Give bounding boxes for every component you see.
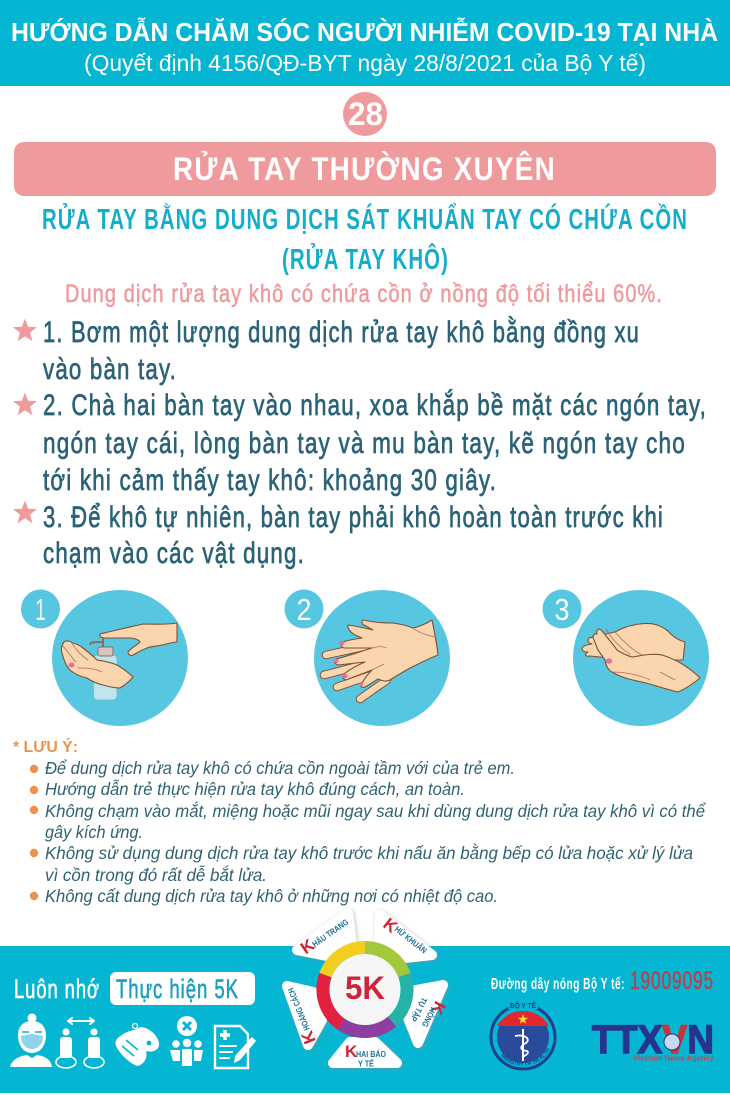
- illustration 2: rubbing hands: 2: [296, 592, 312, 627]
- note items: Không chạm vào mắt, miệng hoặc mũi ngay sau khi dùng dung dịch rửa tay khô vì có thể: [45, 801, 706, 821]
- petal labels: Y TẾ: [358, 1058, 374, 1068]
- subtitle: (Quyết định 4156/QĐ-BYT ngày 28/8/2021 của Bộ Y tế): [84, 50, 646, 76]
- icon: person with mask: [10, 1014, 52, 1067]
- centre: [330, 954, 400, 1025]
- reminder label: Luôn nhớ: [14, 974, 100, 1004]
- notes heading: * LƯU Ý:: [13, 737, 78, 756]
- note items: Hướng dẫn trẻ thực hiện rửa tay khô đúng cách, an toàn.: [45, 779, 465, 799]
- step 2: [13, 389, 707, 497]
- note items: Không cất dung dịch rửa tay khô ở những nơi có nhiệt độ cao.: [45, 886, 498, 906]
- number badge 28: [343, 92, 387, 136]
- step 3: chạm vào các vật dụng.: [43, 537, 305, 570]
- illustration 1: pump sanitizer: [21, 590, 188, 726]
- petal labels: HẨU TRANG: [310, 916, 351, 949]
- icon: front hand: [593, 629, 700, 692]
- icon: two people distancing: [56, 1018, 104, 1068]
- illustration 1: pump sanitizer: 1: [36, 592, 46, 627]
- petal labels: TỤ TẬP: [408, 996, 430, 1024]
- illustration 3: cupped hands: 3: [554, 592, 570, 627]
- petal labels: [285, 914, 449, 1068]
- step 1: vào bàn tay.: [43, 353, 177, 386]
- reminder label: Thực hiện 5K: [116, 974, 239, 1004]
- icon: top hand: [333, 620, 438, 687]
- ring: [323, 948, 407, 1032]
- icons: 5K actions: [10, 1014, 256, 1068]
- step 1: [13, 316, 640, 386]
- hotline: [491, 967, 714, 995]
- note bullets: [30, 765, 38, 900]
- subheading: (RỬA TAY KHÔ): [282, 242, 449, 276]
- petal labels: HOẢNG CÁCH: [285, 987, 312, 1032]
- icon: star: [13, 392, 37, 415]
- footer band: [0, 946, 730, 1093]
- 5K wheel: 5K: [345, 970, 385, 1006]
- note items: Không sử dụng dung dịch rửa tay khô trước khi nấu ăn bằng bếp có lửa hoặc xử lý lửa: [45, 843, 693, 863]
- logo: Ministry of Health: [490, 1000, 556, 1070]
- notes: [13, 737, 706, 906]
- petal labels: K: [380, 914, 401, 937]
- petal labels: HỬ KHUẨN: [393, 923, 429, 955]
- note items: gây kích ứng.: [45, 822, 143, 842]
- petal labels: K: [297, 1027, 320, 1047]
- petal labels: K: [345, 1042, 358, 1061]
- step 3: [13, 500, 664, 570]
- icon: lower hand fingers: [324, 645, 387, 699]
- petal labels: HAI BÁO: [356, 1049, 386, 1059]
- section banner: [14, 142, 716, 196]
- icon: back hand: [582, 623, 685, 660]
- icon: bottle: [90, 638, 117, 700]
- reminder label: [14, 972, 255, 1005]
- icon: medical form: [215, 1026, 256, 1068]
- icon: star: [13, 500, 37, 523]
- header band: [0, 0, 730, 86]
- icon: group with cross: [170, 1016, 203, 1066]
- section banner: RỬA TAY THƯỜNG XUYÊN: [173, 151, 556, 187]
- icon: washing hands: [115, 1024, 159, 1066]
- logo: Ministry of Health: BỘ Y TẾ: [510, 1000, 536, 1010]
- note items: [45, 758, 706, 906]
- logo: TTXVN: TTXVN: [592, 1018, 714, 1062]
- illustration 3: cupped hands: [542, 590, 709, 726]
- hotline: Đường dây nóng Bộ Y tế:: [491, 976, 625, 993]
- icon: lower hand: [61, 641, 133, 688]
- number badge 28: 28: [348, 96, 383, 132]
- petals: [287, 913, 443, 1063]
- logo: Ministry of Health: MINISTRY OF HEALTH: [500, 1048, 550, 1066]
- icon: upper hand: [100, 623, 177, 655]
- logo: TTXVN: Vietnam News Agency: [633, 1054, 715, 1062]
- step 2: tới khi cảm thấy tay khô: khoảng 30 giây.: [43, 464, 497, 497]
- petal labels: HÔNG: [420, 1006, 439, 1030]
- petal labels: K: [426, 998, 449, 1019]
- 5K wheel: [285, 913, 449, 1068]
- note items: vì cồn trong đó rất dễ bắt lửa.: [45, 865, 267, 885]
- illustration 2: rubbing hands: [284, 590, 450, 726]
- icon: star: [13, 318, 37, 341]
- subheading: [42, 202, 688, 276]
- note items: Để dung dịch rửa tay khô có chứa cồn ngoài tầm với của trẻ em.: [45, 758, 515, 778]
- petal labels: K: [297, 935, 319, 958]
